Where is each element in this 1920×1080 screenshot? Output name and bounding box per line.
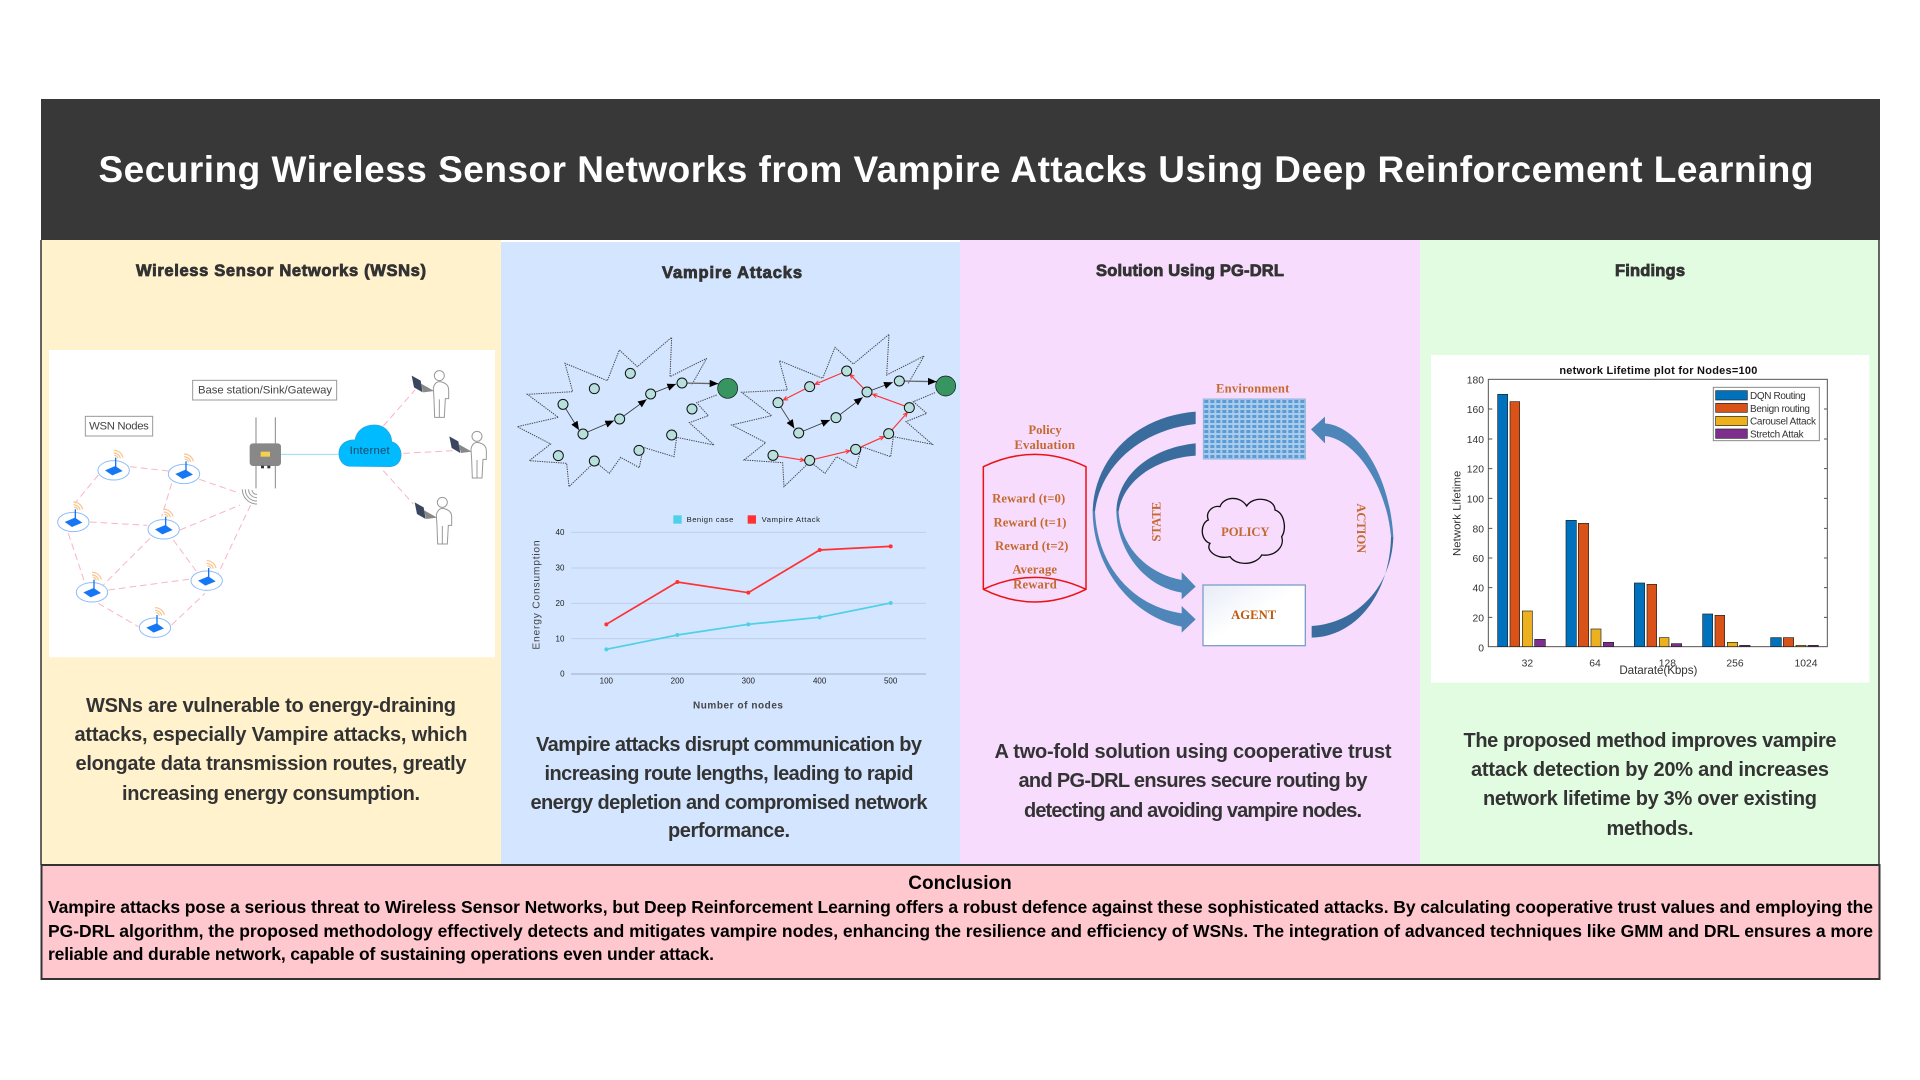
- policy evaluation cylinder: Evaluation: [1014, 438, 1075, 452]
- policy cloud: [1202, 498, 1284, 563]
- icon: gateway: [242, 417, 281, 504]
- text: vampire description: [530, 734, 928, 842]
- environment: Environment: [1216, 381, 1290, 395]
- text: findings description: attack detection by 20% and increases: [1471, 759, 1829, 781]
- legend: Vampire Attack: [762, 515, 820, 524]
- y axis labels: 180: [1467, 375, 1484, 386]
- text: findings description: [1464, 730, 1836, 840]
- text: conclusion body: reliable and durable network, capable of sustaining operations even under attack.: [48, 944, 714, 964]
- policy evaluation cylinder: Average: [1012, 562, 1057, 576]
- label: WSN Nodes: WSN Nodes: [89, 421, 149, 433]
- y axis labels: 120: [1467, 465, 1484, 476]
- diagram: vampire route: [732, 334, 956, 487]
- legend: Benign routing: [1750, 404, 1810, 415]
- arrow: action: [1311, 417, 1393, 638]
- label: STATE: STATE: [1150, 502, 1164, 542]
- x axis labels: 64: [1589, 659, 1601, 670]
- text: conclusion body: PG-DRL algorithm, the proposed methodology effectively detects and mitigates vampire nodes, enhancing the resilience and efficiency of WSNs. The integration of advanced techniques like GMM and DRL ensures a more: [48, 921, 1873, 941]
- x axis labels: Datarate(Kbps): [1619, 664, 1697, 677]
- text: WSNs description: elongate data transmission routes, greatly: [76, 753, 467, 775]
- y axis labels: 0: [1478, 643, 1484, 654]
- bar chart: network lifetime: [1431, 355, 1869, 683]
- text: solution description: A two-fold solution using cooperative trust: [994, 741, 1392, 763]
- panel: Wireless Sensor Networks: [41, 240, 501, 865]
- agent box: [1203, 585, 1305, 646]
- x axis labels: 32: [1522, 659, 1533, 670]
- legend: [1713, 387, 1819, 441]
- axis labels: Number of nodes: [693, 701, 783, 712]
- series: benign: [604, 601, 893, 651]
- panel: Vampire Attacks: [501, 242, 960, 865]
- diagram: reinforcement learning loop: [983, 381, 1393, 646]
- axis labels: 40: [556, 528, 565, 537]
- text: vampire description: performance.: [668, 820, 790, 842]
- heading: Vampire Attacks: Vampire Attacks: [662, 264, 802, 282]
- text: solution description: [994, 741, 1392, 822]
- text: findings description: network lifetime by 3% over existing: [1483, 788, 1817, 810]
- header banner: [41, 99, 1880, 240]
- axis labels: 10: [556, 634, 565, 643]
- legend: [673, 515, 820, 524]
- text: solution description: detecting and avoiding vampire nodes.: [1024, 800, 1362, 822]
- axis labels: 20: [556, 599, 565, 608]
- environment: [1203, 381, 1305, 459]
- link: gateway to cloud: [281, 453, 338, 456]
- policy evaluation cylinder: [983, 423, 1086, 602]
- axis labels: Energy Consumption: [532, 540, 543, 650]
- axis labels: 200: [671, 676, 685, 685]
- legend: Benign case: [687, 515, 733, 524]
- y axis labels: 60: [1472, 554, 1484, 565]
- icon: internet cloud: Internet: [350, 445, 391, 457]
- policy evaluation cylinder: Reward (t=0): [992, 492, 1065, 506]
- y axis labels: 40: [1472, 584, 1484, 595]
- axis labels: 0: [560, 670, 565, 679]
- icon: internet cloud: [339, 425, 401, 467]
- axis labels: 100: [600, 676, 614, 685]
- heading: findings: Findings: [1615, 262, 1685, 280]
- policy evaluation cylinder: Reward (t=2): [995, 539, 1068, 553]
- panel: conclusion: [42, 865, 1880, 979]
- network diagram: [49, 350, 495, 657]
- axis labels: 300: [742, 676, 756, 685]
- group 64: [1566, 520, 1614, 647]
- axis labels: 30: [556, 564, 565, 573]
- legend: Stretch Attak: [1750, 429, 1804, 440]
- axis labels: 500: [884, 676, 898, 685]
- text: WSNs description: attacks, especially Vampire attacks, which: [74, 724, 468, 746]
- x axis labels: [1522, 659, 1818, 677]
- x axis labels: 1024: [1795, 659, 1818, 670]
- y axis labels: 80: [1472, 524, 1484, 535]
- y axis labels: Network Lifetime: [1451, 471, 1463, 556]
- diagram: benign route: [517, 337, 738, 487]
- text: vampire description: energy depletion and compromised network: [530, 792, 928, 814]
- text: WSNs description: WSNs are vulnerable to energy-draining: [86, 695, 456, 717]
- group 256: [1703, 614, 1750, 647]
- x axis labels: 128: [1659, 659, 1676, 670]
- panel: Solution Using PG-DRL: [960, 240, 1420, 865]
- y axis labels: [1451, 375, 1484, 654]
- y axis labels: 140: [1467, 435, 1484, 446]
- text: findings description: The proposed method improves vampire: [1464, 730, 1836, 752]
- axis labels: 400: [813, 676, 827, 685]
- y axis labels: 100: [1467, 494, 1484, 505]
- text: solution description: and PG-DRL ensures secure routing by: [1018, 770, 1368, 792]
- sensor nodes: [58, 450, 222, 637]
- policy evaluation cylinder: Reward (t=1): [993, 515, 1066, 529]
- text: conclusion body: [48, 897, 1873, 964]
- title: Securing Wireless Sensor Networks from Vampire Attacks Using Deep Reinforcement Learning: [98, 149, 1814, 190]
- dashed links: [68, 390, 453, 627]
- icon: users: [412, 371, 486, 544]
- bar chart: network lifetime: network Lifetime plot for Nodes=100: [1559, 365, 1757, 377]
- x axis labels: 256: [1726, 659, 1744, 670]
- policy evaluation cylinder: Reward: [1013, 577, 1057, 591]
- heading: conclusion: Conclusion: [908, 873, 1012, 894]
- text: conclusion body: Vampire attacks pose a serious threat to Wireless Sensor Networks, but Deep Reinforcement Learning offers a robust defence against these sophisticated attacks. By calculating cooperative trust values and employing the: [48, 897, 1873, 917]
- y axis labels: 20: [1472, 613, 1484, 624]
- text: vampire description: increasing route lengths, leading to rapid: [544, 763, 914, 785]
- policy evaluation cylinder: Policy: [1028, 423, 1062, 437]
- policy cloud: POLICY: [1221, 525, 1269, 539]
- text: vampire description: Vampire attacks disrupt communication by: [536, 734, 923, 756]
- arrow: inner state: [1116, 443, 1196, 599]
- label: base station: [193, 380, 337, 400]
- arrow: outer state: [1093, 412, 1196, 633]
- group 32: [1498, 394, 1545, 647]
- heading: WSNs: Wireless Sensor Networks (WSNs): [136, 262, 426, 280]
- legend: DQN Routing: [1750, 391, 1806, 402]
- y axis labels: 160: [1467, 405, 1484, 416]
- line chart: energy consumption: [532, 515, 926, 712]
- label: ACTION: ACTION: [1354, 503, 1368, 553]
- label: WSN Nodes: [85, 416, 153, 436]
- agent box: AGENT: [1231, 608, 1277, 622]
- series: vampire: [604, 544, 893, 626]
- group 128: [1634, 583, 1682, 647]
- heading: solution: Solution Using PG-DRL: [1096, 262, 1284, 280]
- text: WSNs description: increasing energy consumption.: [122, 783, 420, 805]
- text: findings description: methods.: [1606, 818, 1694, 840]
- panel borders: [41, 240, 1879, 865]
- group 1024: [1771, 638, 1818, 647]
- axis labels: [532, 528, 898, 712]
- label: base station: Base station/Sink/Gateway: [198, 385, 332, 397]
- panel: Findings: [1420, 240, 1879, 865]
- legend: Carousel Attack: [1750, 416, 1816, 427]
- text: WSNs description: [74, 695, 468, 805]
